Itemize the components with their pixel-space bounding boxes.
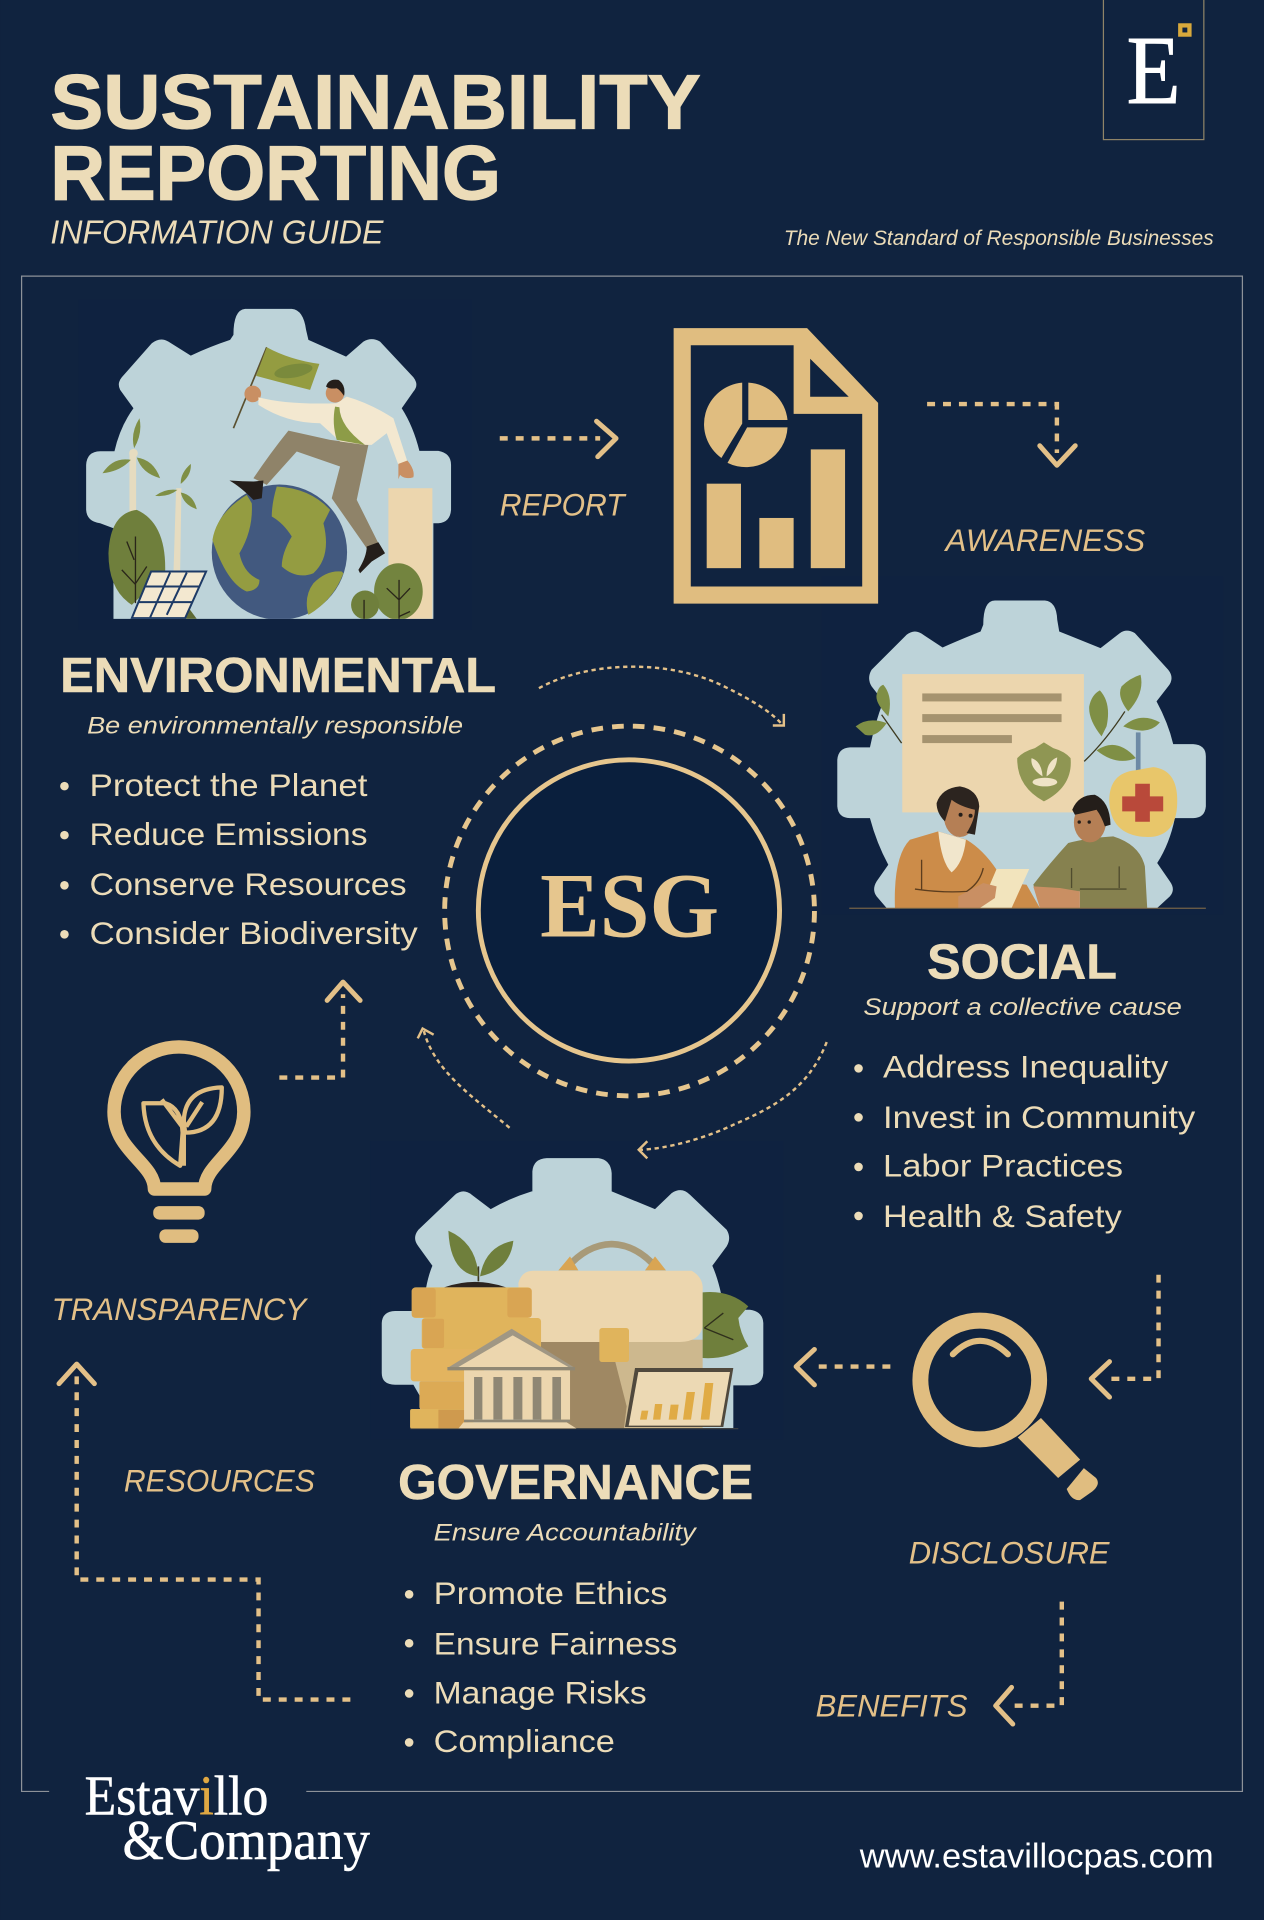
list: social: Invest in Community	[883, 1099, 1195, 1135]
list: social: Labor Practices	[883, 1148, 1123, 1184]
arrow: to report	[500, 421, 616, 457]
list: environmental: Protect the Planet	[90, 767, 368, 803]
arrow: resources route	[59, 1364, 353, 1700]
title: SUSTAINABILITY	[50, 60, 701, 146]
heading: governance	[398, 1456, 753, 1546]
panel: governance illustration	[370, 1141, 783, 1440]
content frame	[22, 276, 1242, 1791]
icon: light bulb with leaves	[114, 1047, 244, 1243]
company logo: Estavillo	[85, 1766, 268, 1828]
list: governance: Ensure Fairness	[434, 1625, 677, 1661]
list: governance	[405, 1575, 677, 1759]
label: disclosure: DISCLOSURE	[909, 1535, 1110, 1571]
list: social	[854, 1049, 1195, 1234]
arrow: magnifier to governance	[796, 1349, 890, 1385]
list: governance: Compliance	[434, 1723, 615, 1759]
arrow: curved to transparency	[418, 1029, 510, 1128]
label: awareness: AWARENESS	[943, 522, 1145, 558]
list: governance: Manage Risks	[434, 1674, 647, 1710]
heading: environmental: ENVIRONMENTAL	[60, 649, 496, 703]
list: environmental	[60, 767, 418, 951]
heading: environmental	[60, 649, 496, 739]
title: REPORTING	[50, 131, 501, 217]
logo badge: E	[1127, 17, 1181, 125]
icon: magnifying glass	[920, 1321, 1098, 1500]
arrow: curved to governance	[639, 1042, 827, 1158]
arrow: disclosure to benefits	[996, 1602, 1062, 1724]
title	[50, 60, 701, 217]
list: environmental: Reduce Emissions	[90, 816, 368, 852]
label: benefits: BENEFITS	[816, 1688, 968, 1724]
list: environmental: Conserve Resources	[90, 866, 407, 902]
subtitle: INFORMATION GUIDE	[50, 215, 384, 252]
heading: environmental: Be environmentally responsible	[87, 712, 463, 739]
center: ESG circle: ESG	[540, 855, 719, 957]
arrow: to awareness	[927, 404, 1075, 465]
label: resources: RESOURCES	[124, 1462, 315, 1498]
company logo: &Company	[123, 1810, 370, 1872]
heading: social: SOCIAL	[927, 935, 1117, 989]
list: environmental: Consider Biodiversity	[90, 915, 418, 951]
panel: social illustration	[822, 576, 1223, 915]
panel: environmental illustration	[86, 308, 452, 619]
list: social: Health & Safety	[883, 1198, 1122, 1234]
website: www.estavillocpas.com	[859, 1837, 1214, 1875]
arrow: bulb to environmental	[279, 982, 360, 1078]
arrow: into magnifier	[1091, 1275, 1159, 1397]
arrow: curved to social	[539, 667, 784, 726]
center: ESG circle	[445, 726, 814, 1096]
heading: governance: Ensure Accountability	[434, 1519, 698, 1546]
label: report: REPORT	[500, 487, 627, 523]
heading: social: Support a collective cause	[863, 994, 1182, 1021]
tagline: The New Standard of Responsible Businesses	[784, 227, 1214, 250]
heading: governance: GOVERNANCE	[398, 1456, 753, 1510]
list: governance: Promote Ethics	[434, 1575, 668, 1611]
logo badge	[1103, 0, 1204, 140]
label: transparency: TRANSPARENCY	[52, 1291, 309, 1327]
icon: report document	[674, 328, 878, 604]
list: social: Address Inequality	[883, 1049, 1168, 1085]
company logo	[85, 1766, 370, 1872]
heading: social	[863, 935, 1182, 1021]
